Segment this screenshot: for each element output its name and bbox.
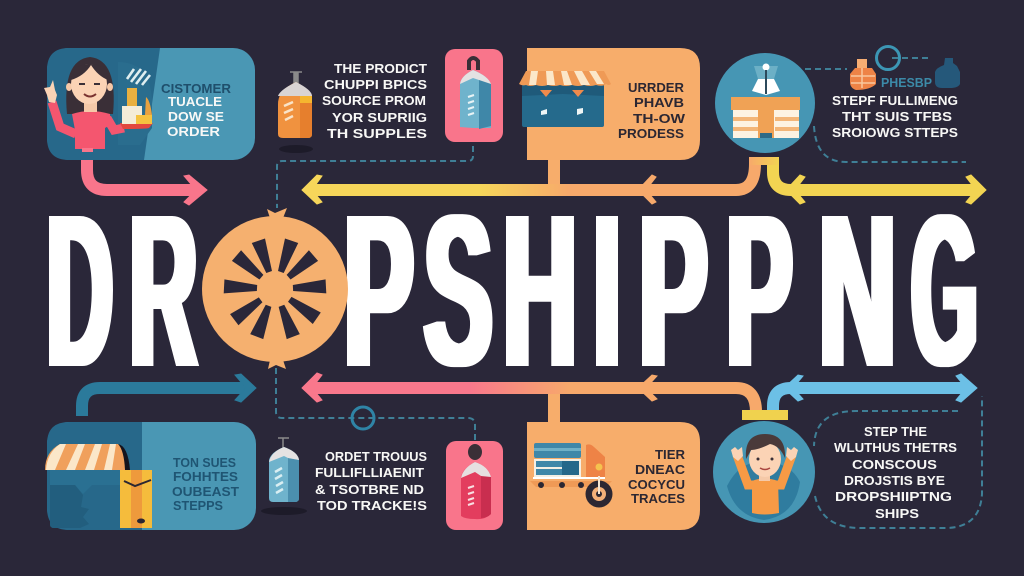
panel: delivery traces — [527, 422, 700, 530]
panel: order process — [519, 48, 700, 160]
title — [47, 168, 978, 413]
text: store steps: STEPPS — [173, 498, 223, 513]
text: customer: ORDER — [167, 124, 221, 139]
text: order tracking: FULLIFLLIAENIT — [315, 465, 424, 480]
text: final step — [834, 424, 957, 521]
title: R — [130, 168, 197, 413]
text: delivery traces: DNEAC — [635, 462, 686, 477]
icon: delivery cart — [530, 443, 612, 508]
icon: orange bottle — [278, 72, 313, 153]
icon: storefront with box — [45, 444, 152, 528]
text: product source — [322, 61, 427, 141]
connector: yellow bar — [742, 410, 788, 420]
icon: blue bottle — [460, 58, 491, 129]
text: delivery traces — [628, 447, 686, 506]
text: order process — [618, 80, 686, 141]
text: store steps: OUBEAST — [172, 484, 239, 499]
text: delivery traces: COCYCU — [628, 477, 685, 492]
text: order tracking: TOD TRACKE!S — [317, 498, 427, 513]
panel: pink bottle card bottom — [446, 441, 503, 530]
title: G — [911, 169, 978, 411]
connector: dashed frame bottom right — [814, 396, 982, 528]
title: P — [344, 170, 414, 413]
icon: ring target — [876, 46, 900, 70]
arrow: teal bottom left arrow — [82, 374, 256, 416]
text: order process: PRODESS — [618, 126, 684, 141]
text: customer: TUACLE — [168, 94, 222, 109]
text: delivery traces: TIER — [655, 447, 686, 462]
text: final step: WLUTHUS THETRS — [834, 440, 957, 455]
panel: pink bottle card — [445, 49, 503, 142]
text: delivery traces: TRACES — [631, 491, 685, 506]
arrow: pink customer arrow — [87, 148, 207, 205]
text: store steps: FOHHTES — [173, 469, 238, 484]
icon: blue bottle — [261, 438, 307, 515]
icon: woman with tray — [44, 57, 153, 152]
title: S — [424, 170, 493, 411]
icon: red bottle — [461, 444, 491, 519]
text: product source: SOURCE PROM — [322, 93, 426, 108]
text: product source: THE PRODICT — [334, 61, 427, 76]
arrow: light blue double arrow bottom right — [773, 374, 977, 412]
text: final step: STEP THE — [864, 424, 927, 439]
icon: shop — [519, 71, 611, 127]
text: fulfilment: STEPF FULLIMENG — [832, 93, 958, 108]
text: order tracking: & TSOTBRE ND — [315, 482, 424, 497]
text: customer — [161, 81, 232, 139]
text: final step: CONSCOUS — [852, 457, 937, 472]
arrow: yellow double arrow top right — [773, 160, 986, 204]
text: order process: TH-OW — [633, 111, 686, 126]
title: P — [639, 170, 708, 413]
connector: junction under top circle — [749, 157, 779, 165]
connector: dashed line top pink card to wheel — [277, 146, 473, 208]
text: store steps — [172, 455, 239, 513]
text: fulfilment — [832, 75, 958, 140]
text: fulfilment: THT SUIS TFBS — [842, 109, 952, 124]
connector: dashed line wheel to bottom pink card — [276, 368, 475, 440]
text: final step: DROJSTIS BYE — [844, 473, 945, 488]
text: product source: YOR SUPRIIG — [332, 110, 427, 125]
title: N — [819, 170, 896, 413]
title: I — [594, 168, 621, 412]
text: product source: TH SUPPLES — [327, 126, 427, 141]
icon: dark jar — [935, 58, 960, 88]
icon: orange wheel replacing the O — [202, 208, 348, 369]
text: fulfilment: SROIOWG STTEPS — [832, 125, 958, 140]
title: D — [47, 170, 113, 413]
text: customer: CISTOMER — [161, 81, 232, 96]
connector: dashed curve top right — [814, 126, 966, 162]
text: customer: DOW SE — [168, 109, 224, 124]
title: P — [726, 169, 792, 412]
panel: customer order — [44, 48, 255, 160]
icon: happy customer circle — [713, 421, 815, 523]
text: order process: URRDER — [628, 80, 685, 95]
arrow: pink to orange bottom arrow — [302, 373, 756, 424]
text: final step: SHIPS — [875, 506, 919, 521]
icon: fulfilment circle — [715, 53, 815, 153]
text: order tracking — [315, 449, 427, 513]
connector: dashed lines to mini icons — [805, 58, 932, 69]
text: order process: PHAVB — [634, 95, 684, 110]
text: fulfilment: PHESBP — [881, 75, 932, 90]
icon: orange parcels — [850, 59, 876, 90]
text: final step: DROPSHIIPTNG — [835, 489, 952, 504]
text: order tracking: ORDET TROUUS — [325, 449, 427, 464]
icon: ring on bottom dashed line — [352, 407, 374, 429]
text: store steps: TON SUES — [173, 455, 236, 470]
text: product source: CHUPPI BPICS — [324, 77, 427, 92]
panel: store steps — [45, 422, 256, 530]
title: H — [503, 170, 577, 413]
arrow: yellow to orange top arrow — [302, 158, 755, 204]
